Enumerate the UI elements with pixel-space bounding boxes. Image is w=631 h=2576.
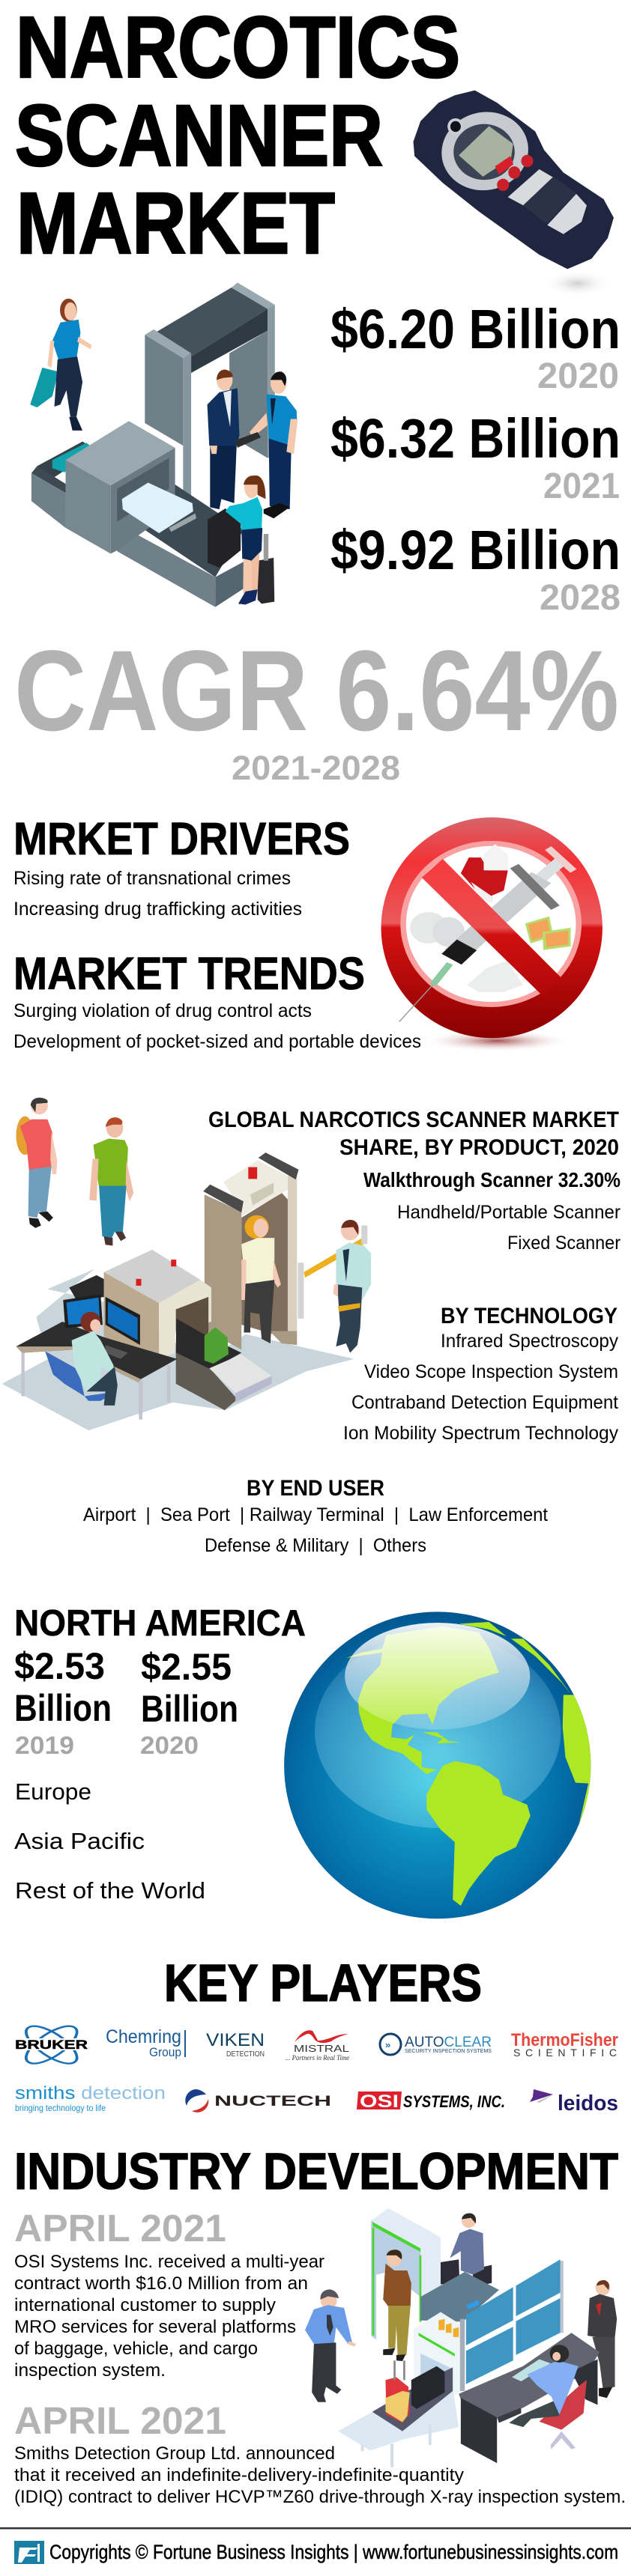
by technology list: BY TECHNOLOGY [441,1304,618,1328]
logo: Chemring Group: Group [149,2045,181,2059]
market trends [13,948,421,1052]
title: NARCOTICS [16,0,460,96]
CAGR headline: 2021-2028 [232,749,400,787]
logo: Thermo Fisher Scientific: ThermoFisher [511,2030,618,2050]
north america regional stats: $2.53 [14,1645,105,1687]
development item: April 2021, Smiths Detection: Smiths Detection Group Ltd. announced [14,2443,335,2464]
walk-through gate [371,2208,441,2340]
logo: Smiths Detection [15,2083,166,2113]
officer in blue shirt [235,371,298,518]
logo: Thermo Fisher Scientific [511,2030,618,2059]
market size 2028 [330,519,621,618]
development item: April 2021, Smiths Detection: that it received an indefinite-delivery-indefinite-quantity [14,2465,464,2485]
development item: April 2021, OSI Systems: APRIL 2021 [14,2207,226,2250]
title: MARKET [16,174,335,272]
female officer in teal top [226,476,265,604]
north america regional stats: NORTH AMERICA [14,1603,306,1644]
product share heading: SHARE, BY PRODUCT, 2020 [339,1135,619,1160]
development item: April 2021, OSI Systems [14,2207,324,2381]
logo: Autoclear: » [385,2039,390,2050]
north america regional stats: $2.55 [141,1646,232,1688]
x-ray baggage machine [31,421,246,607]
product segments list [363,1168,621,1254]
market size 2028: 2028 [540,578,621,618]
barrier post and rope [298,1226,367,1319]
development item: April 2021, Smiths Detection: APRIL 2021 [14,2399,226,2442]
man in green shirt [89,1117,133,1245]
logo: Mistral [286,2030,349,2062]
market drivers: Rising rate of transnational crimes [13,868,291,889]
logo: Chemring Group [106,2026,186,2059]
other regions list [14,1778,205,1904]
monitor wall [460,2259,564,2391]
product share heading [208,1108,619,1160]
passenger with teal suitcase [30,299,91,431]
icon: no drugs prohibition sign [381,818,603,1052]
logo: Leidos: leidos [558,2092,618,2115]
illustration: handheld narcotics scanner device [413,91,614,297]
other regions list: Asia Pacific [14,1828,145,1854]
logo: Mistral: ... Partners in Real Time [286,2054,349,2062]
logo: OSI Systems [357,2092,505,2112]
north america regional stats: Billion [141,1688,238,1730]
development item: April 2021, OSI Systems: contract worth $16.0 Million from an [14,2273,308,2294]
operator desk with monitors [16,1295,177,1420]
market trends: Development of pocket-sized and portable devices [13,1031,421,1052]
market trends: Surging violation of drug control acts [13,1000,312,1021]
logo: Autoclear: AUTOCLEAR [405,2035,492,2050]
logo: Nuctech: NUCTECH [214,2094,331,2109]
logo: Bruker: BRUKER [15,2038,88,2052]
walkthrough metal detector arch [203,1152,298,1349]
other regions list: Europe [15,1778,91,1805]
x-ray scanner unit and belt [338,2272,499,2467]
north america regional stats: 2020 [140,1731,199,1759]
man with briefcases [441,2213,492,2287]
development item: April 2021, OSI Systems: MRO services for several platforms [14,2317,296,2337]
product segments list: Fixed Scanner [507,1233,621,1254]
illustration: inspection control room [305,2208,617,2467]
market size 2021: 2021 [543,467,620,506]
development item: April 2021, OSI Systems: OSI Systems Inc. received a multi-year [14,2252,324,2272]
by technology list: Video Scope Inspection System [364,1361,618,1382]
development item: April 2021, OSI Systems: of baggage, vehicle, and cargo [14,2339,258,2359]
heading: key players: KEY PLAYERS [164,1954,482,2012]
north america regional stats: 2019 [15,1731,74,1759]
operator desk with chair [459,2333,600,2463]
person walking through detector [241,1215,281,1343]
man in brown sweater [383,2250,411,2361]
by end user list: BY END USER [247,1476,384,1501]
security guard [333,1220,371,1352]
baggage x-ray machine [69,1250,271,1410]
icon: globe showing the Americas [284,1611,594,1919]
security guard in cap [305,2289,356,2402]
logo: Bruker [15,2021,88,2068]
by technology list: Ion Mobility Spectrum Technology [343,1423,618,1444]
development item: April 2021, OSI Systems: international customer to supply [14,2295,276,2315]
logo: Smiths Detection: bringing technology to life [15,2103,106,2113]
development item: April 2021, Smiths Detection: (IDIQ) contract to deliver HCVP™Z60 drive-through X-ray inspection system. [14,2487,626,2507]
product segments list: Handheld/Portable Scanner [397,1202,621,1223]
by end user list: Airport | Sea Port | Railway Terminal | Law Enforcement [83,1504,548,1525]
market drivers: Increasing drug trafficking activities [13,899,302,920]
by technology list: Contraband Detection Equipment [351,1392,618,1413]
logo: OSI Systems: OSI [360,2092,399,2112]
logo: Nuctech [185,2089,331,2112]
title: SCANNER [15,87,383,184]
other regions list: Rest of the World [15,1877,205,1904]
by end user list: Defense & Military | Others [205,1535,426,1556]
logo: Mistral: MISTRAL [294,2043,349,2054]
logo: Chemring Group: Chemring [106,2026,181,2047]
market size 2020: 2020 [537,356,619,396]
man with backpack [16,1098,57,1228]
illustration: airport security scanning checkpoint [30,282,298,607]
market drivers: MRKET DRIVERS [13,813,350,864]
logo: Viken Detection: DETECTION [226,2050,265,2059]
by technology list: Infrared Spectroscopy [441,1331,618,1352]
logo: Leidos [530,2089,618,2115]
logo: Thermo Fisher Scientific: SCIENTIFIC [513,2047,617,2059]
seated operator [45,1312,118,1406]
market size 2020 [330,298,621,396]
businessman in suit [208,369,240,509]
illustration: walkthrough scanner checkpoint [2,1098,371,1430]
north america regional stats: Billion [14,1687,112,1729]
company logos [15,2021,618,2115]
footer [0,2527,631,2564]
by end user list [83,1476,548,1556]
black suitcase [208,508,274,604]
north america regional stats [14,1603,306,1759]
logo: Autoclear [380,2034,492,2055]
market size 2021 [330,407,621,506]
by technology list [343,1304,618,1444]
title [15,0,460,272]
market drivers [13,813,350,920]
development item: April 2021, Smiths Detection [14,2399,626,2507]
development item: April 2021, OSI Systems: inspection system. [14,2360,166,2381]
scanning arch [145,282,275,509]
standing agent with earpiece [588,2280,617,2398]
icon: Fortune Business Insights logo [14,2541,44,2564]
floor shadow [2,1269,354,1430]
logo: OSI Systems: SYSTEMS, INC. [403,2092,505,2111]
logo: Autoclear: SECURITY INSPECTION SYSTEMS [405,2047,492,2054]
market trends: MARKET TRENDS [13,948,365,999]
logo: Viken Detection: VIKEN [206,2030,265,2050]
logo: Viken Detection [206,2030,265,2059]
logo: Smiths Detection: smiths detection [15,2083,166,2103]
